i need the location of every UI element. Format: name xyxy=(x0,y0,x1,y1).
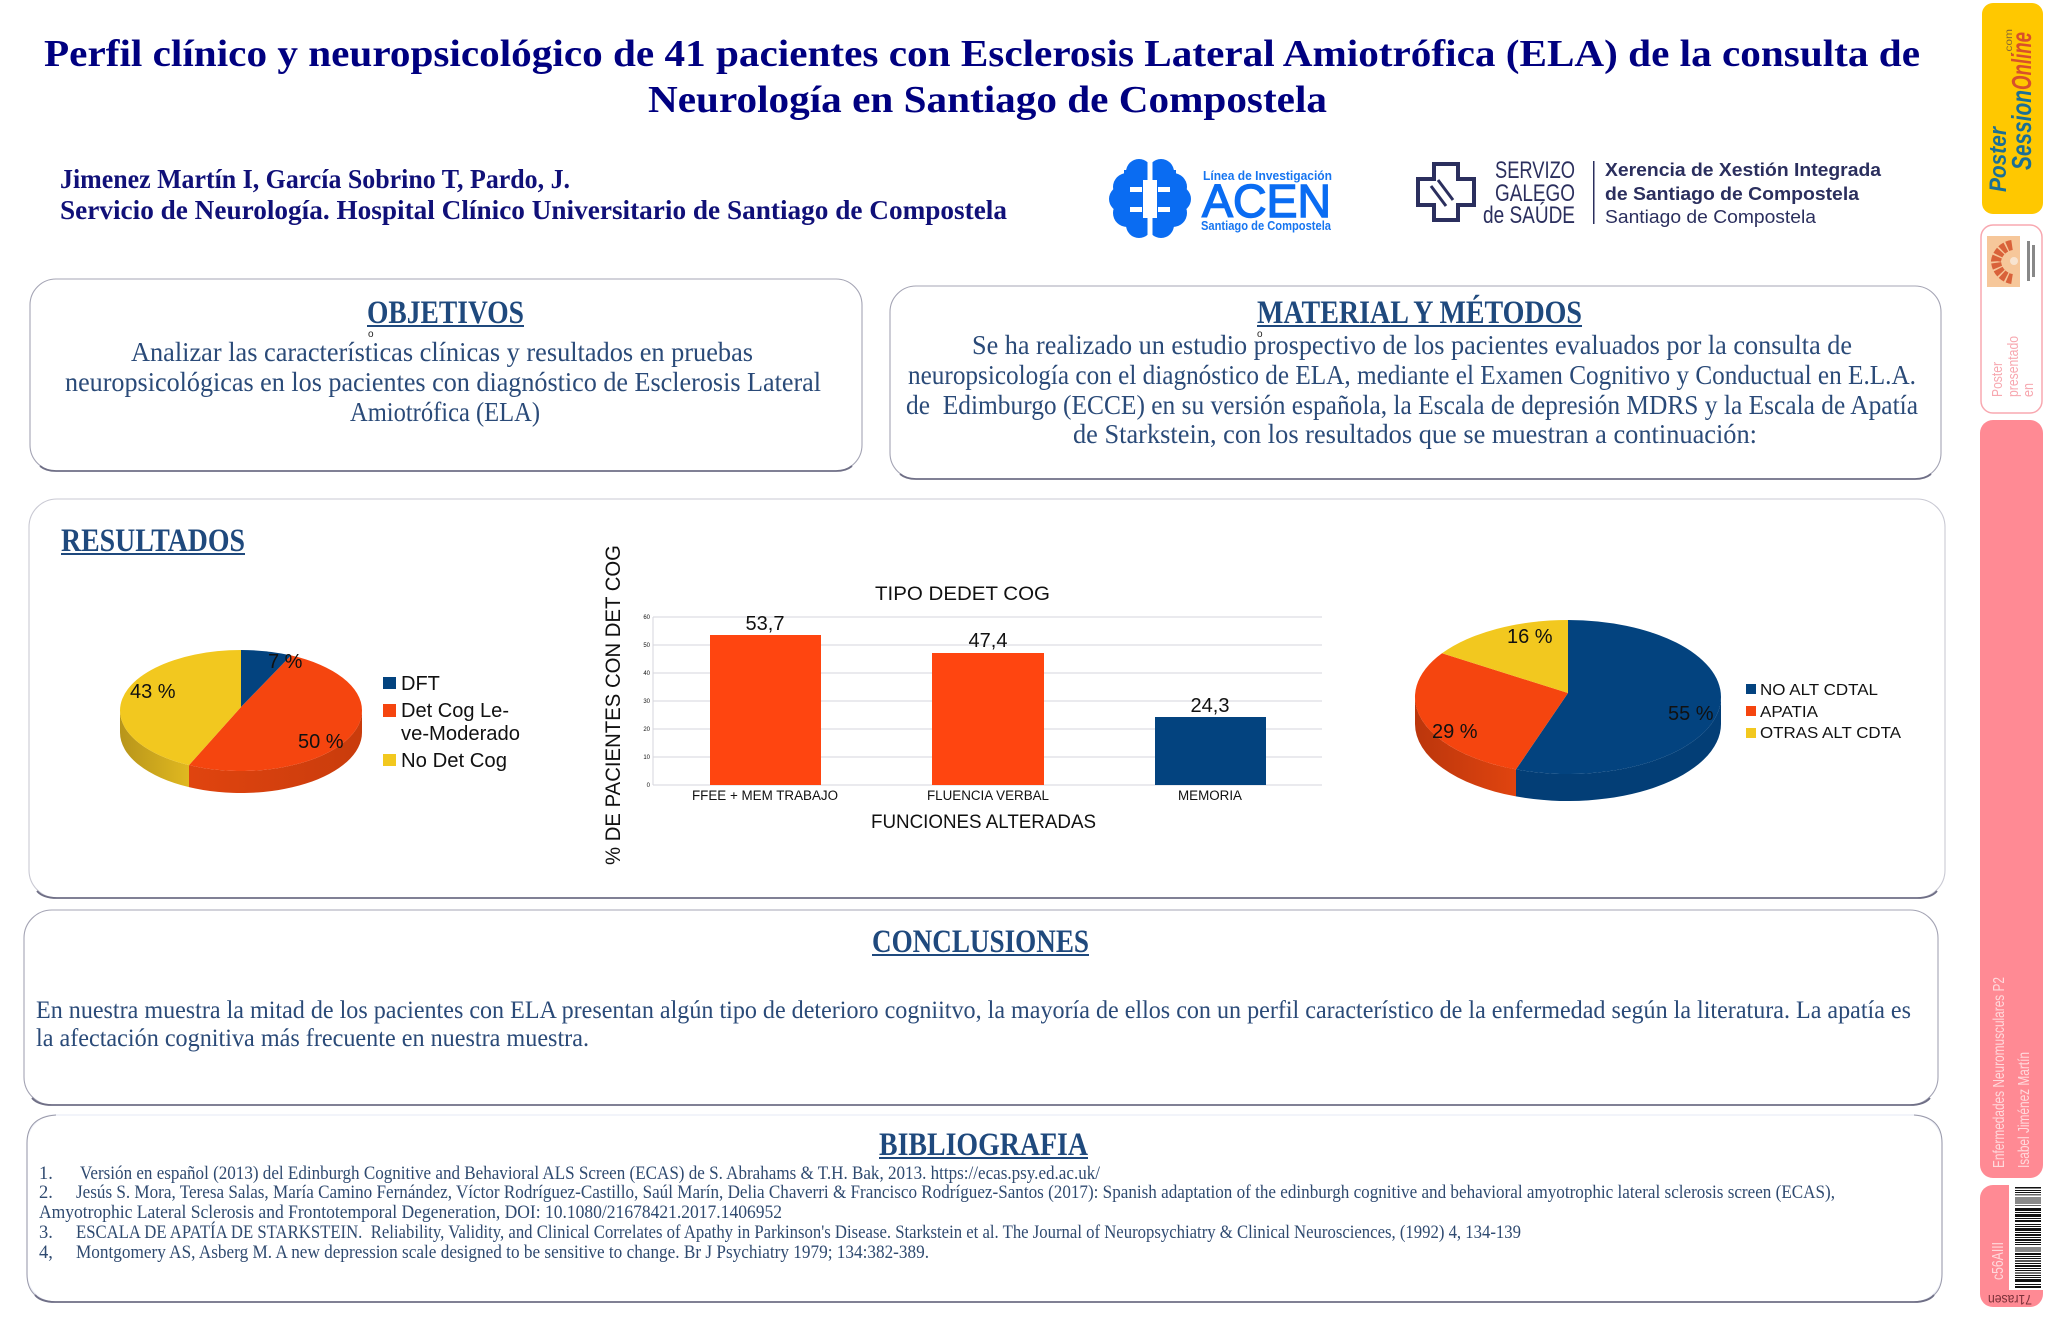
labels: pie percentages: 55 % xyxy=(1668,703,1714,725)
authors and affiliation: Servicio de Neurología. Hospital Clínico Universitario de Santiago de Compostela xyxy=(60,194,1007,225)
references list: 4, xyxy=(39,1243,53,1263)
labels: pie percentages: 50 % xyxy=(298,731,344,753)
text: Xerencia xyxy=(1605,159,1882,227)
labels: pie percentages xyxy=(1432,626,1714,743)
authors and affiliation: Jimenez Martín I, García Sobrino T, Pardo, J. xyxy=(60,163,570,194)
references list: Montgomery AS, Asberg M. A new depression scale designed to be sensitive to change. Br J Psychiatry 1979; 134:382-389. xyxy=(76,1243,929,1263)
text: poster presentado en: Poster xyxy=(1989,362,2006,397)
sidebar: session panel: Isabel Jiménez Martín xyxy=(2016,1052,2033,1168)
legend: pie alteraciones conductuales: APATIA xyxy=(1760,704,1818,721)
legend: pie deterioro cognitivo: Det Cog Le- xyxy=(401,700,509,722)
panel: material y métodos xyxy=(890,286,1941,479)
legend: pie alteraciones conductuales xyxy=(1746,682,1901,742)
sidebar: PosterSessionOnline badge: Session xyxy=(2006,90,2037,170)
chart title: TIPO DEDET COG xyxy=(875,583,1050,605)
heading: objetivos: OBJETIVOS xyxy=(367,295,524,331)
sidebar: session panel xyxy=(1980,420,2043,1178)
bar values xyxy=(746,613,1230,717)
bars xyxy=(710,635,1266,785)
text: Servizo Galego de Saúde: SERVIZO xyxy=(1495,157,1575,184)
text: Servizo Galego de Saúde: GALEGO xyxy=(1495,180,1575,207)
chart: pie deterioro cognitivo xyxy=(120,650,520,793)
y axis ticks: 20 xyxy=(643,727,651,733)
labels: pie percentages: 7 % xyxy=(268,651,303,673)
bar values: 47,4 xyxy=(968,630,1008,652)
text: Xerencia: Santiago de Compostela xyxy=(1605,206,1817,227)
text: conclusiones: la afectación cognitiva más frecuente en nuestra muestra. xyxy=(36,1025,589,1052)
logo: Servizo Galego de Saúde xyxy=(1418,157,1882,229)
text: conclusiones xyxy=(36,997,1911,1052)
text: objetivos: neuropsicológicas en los pacientes con diagnóstico de Esclerosis Lateral xyxy=(65,367,821,397)
x axis title: FUNCIONES ALTERADAS xyxy=(871,812,1096,833)
legend: pie deterioro cognitivo: No Det Cog xyxy=(401,750,507,772)
text: poster presentado en: presentado xyxy=(2005,336,2022,397)
barcode xyxy=(2015,1187,2041,1288)
title: Neurología en Santiago de Compostela xyxy=(648,79,1327,121)
text: material y métodos: neuropsicología con el diagnóstico de ELA, mediante el Examen Cognitivo y Conductual en E.L.A. xyxy=(908,360,1916,390)
text: poster presentado en xyxy=(1989,336,2037,397)
panel: resultados xyxy=(29,499,1945,898)
category labels: FFEE + MEM TRABAJO xyxy=(692,788,838,803)
title: Perfil clínico y neuropsicológico de 41 pacientes con Esclerosis Lateral Amiotrófica (ELA) de la consulta de xyxy=(44,33,1920,75)
chart: pie alteraciones conductuales xyxy=(1415,620,1901,801)
panel: material y métodos: o xyxy=(1257,329,1263,340)
text: Servizo Galego de Saúde: de SAÚDE xyxy=(1483,202,1575,229)
panel: bibliografia xyxy=(27,1115,1942,1302)
references list: 1. xyxy=(39,1164,53,1184)
icon: society brain logo xyxy=(1987,236,2035,287)
text: ACEN: Santiago de Compostela xyxy=(1201,219,1332,233)
sidebar: PosterSessionOnline badge: Online xyxy=(2006,32,2037,90)
text: objetivos: Analizar las características clínicas y resultados en pruebas xyxy=(131,337,753,367)
sidebar: barcode tag xyxy=(1980,1185,2043,1308)
text: ACEN: Línea de Investigación xyxy=(1203,169,1332,183)
bar values: 53,7 xyxy=(746,613,784,635)
text: conclusiones: En nuestra muestra la mitad de los pacientes con ELA presentan algún tipo de deterioro cogniitvo, la mayoría de ellos con un perfil característico de la enfermedad según la literatura. La apatía es xyxy=(36,997,1911,1024)
y axis ticks xyxy=(643,615,651,789)
heading: material y métodos: MATERIAL Y MÉTODOS xyxy=(1257,295,1582,331)
legend: pie deterioro cognitivo: ve-Moderado xyxy=(401,723,520,745)
heading: conclusiones: CONCLUSIONES xyxy=(872,924,1089,960)
sidebar: barcode tag: 71rasen xyxy=(1988,1292,2032,1308)
references list: 2. xyxy=(39,1183,53,1203)
panel: conclusiones xyxy=(24,910,1938,1105)
text: objetivos xyxy=(65,337,821,427)
text: ACEN: ACEN xyxy=(1202,175,1331,227)
references list: Amyotrophic Lateral Sclerosis and Frontotemporal Degeneration, DOI: 10.1080/21678421.2017.1406952 xyxy=(39,1203,782,1223)
sidebar: barcode tag: c56AIII xyxy=(1990,1242,2007,1280)
sidebar: session panel: Enfermedades Neuromusculares P2 xyxy=(1991,977,2008,1168)
y axis ticks: 30 xyxy=(643,699,651,705)
category labels: MEMORIA xyxy=(1178,788,1242,803)
heading: resultados: RESULTADOS xyxy=(61,523,245,559)
legend: pie deterioro cognitivo xyxy=(383,673,520,772)
text: material y métodos: de Edimburgo (ECCE) en su versión española, la Escala de depresión MDRS y la Escala de Apatía xyxy=(906,390,1918,420)
sidebar: PosterSessionOnline badge: Poster xyxy=(1985,126,2012,192)
text: Servizo Galego de Saúde xyxy=(1483,157,1575,229)
text: objetivos: Amiotrófica (ELA) xyxy=(350,397,540,427)
text: material y métodos xyxy=(906,330,1918,449)
panel: objetivos xyxy=(30,279,862,471)
chart: bar chart tipo de deterioro xyxy=(602,545,1322,865)
sidebar: poster presentado en xyxy=(1981,225,2042,413)
references list: Jesús S. Mora, Teresa Salas, María Camino Fernández, Víctor Rodríguez-Castillo, Saúl Marín, Delia Chaverri & Francisco Rodríguez-Santos (2017): Spanish adaptation of the edinburgh cognitive and behavioral amyotrophic lateral sclerosis screen (ECAS), xyxy=(76,1183,1835,1203)
y axis ticks: 50 xyxy=(643,643,651,649)
sidebar: PosterSessionOnline badge xyxy=(1982,3,2043,214)
title xyxy=(44,33,1920,121)
category labels: FLUENCIA VERBAL xyxy=(927,788,1049,803)
references list: 3. xyxy=(39,1223,53,1243)
legend: pie alteraciones conductuales: NO ALT CDTAL xyxy=(1760,682,1878,699)
labels: pie percentages: 43 % xyxy=(130,681,176,703)
y axis ticks: 60 xyxy=(643,615,651,621)
references list xyxy=(39,1164,1835,1263)
references list: Versión en español (2013) del Edinburgh Cognitive and Behavioral ALS Screen (ECAS) de S. Abrahams & T.H. Bak, 2013. https://ecas.psy.ed.ac.uk/ xyxy=(80,1164,1101,1184)
text: Xerencia: Xerencia de Xestión Integrada xyxy=(1605,159,1882,180)
icon: health cross xyxy=(1418,164,1474,220)
labels: pie percentages: 29 % xyxy=(1432,721,1478,743)
heading: bibliografia: BIBLIOGRAFIA xyxy=(879,1127,1088,1163)
labels: pie percentages: 16 % xyxy=(1507,626,1553,648)
sidebar: PosterSessionOnline badge: .com xyxy=(2004,29,2015,55)
category labels xyxy=(692,788,1242,803)
text: Xerencia: de Santiago de Compostela xyxy=(1605,183,1860,204)
bar values: 24,3 xyxy=(1190,695,1230,717)
labels: pie percentages xyxy=(130,651,344,753)
y axis title: % DE PACIENTES CON DET COG xyxy=(602,545,625,865)
references list: ESCALA DE APATÍA DE STARKSTEIN. Reliability, Validity, and Clinical Correlates of Apathy in Parkinson's Disease. Starkstein et al. The Journal of Neuropsychiatry & Clinical Neurosciences, (1992) 4, 134-139 xyxy=(76,1221,1521,1243)
text: poster presentado en: en xyxy=(2020,383,2037,397)
text: material y métodos: Se ha realizado un estudio prospectivo de los pacientes evaluados por la consulta de xyxy=(972,330,1852,360)
y axis ticks: 40 xyxy=(643,671,651,677)
text: material y métodos: de Starkstein, con los resultados que se muestran a continuación: xyxy=(1073,419,1757,449)
legend: pie alteraciones conductuales: OTRAS ALT CDTA xyxy=(1760,725,1901,742)
y axis ticks: 10 xyxy=(643,755,651,761)
panel: objetivos: o xyxy=(368,329,374,340)
logo: ACEN xyxy=(1109,158,1332,239)
legend: pie deterioro cognitivo: DFT xyxy=(401,673,440,695)
y axis ticks: 0 xyxy=(647,783,651,789)
icon: ACEN brain xyxy=(1109,158,1191,239)
authors and affiliation xyxy=(60,163,1007,225)
